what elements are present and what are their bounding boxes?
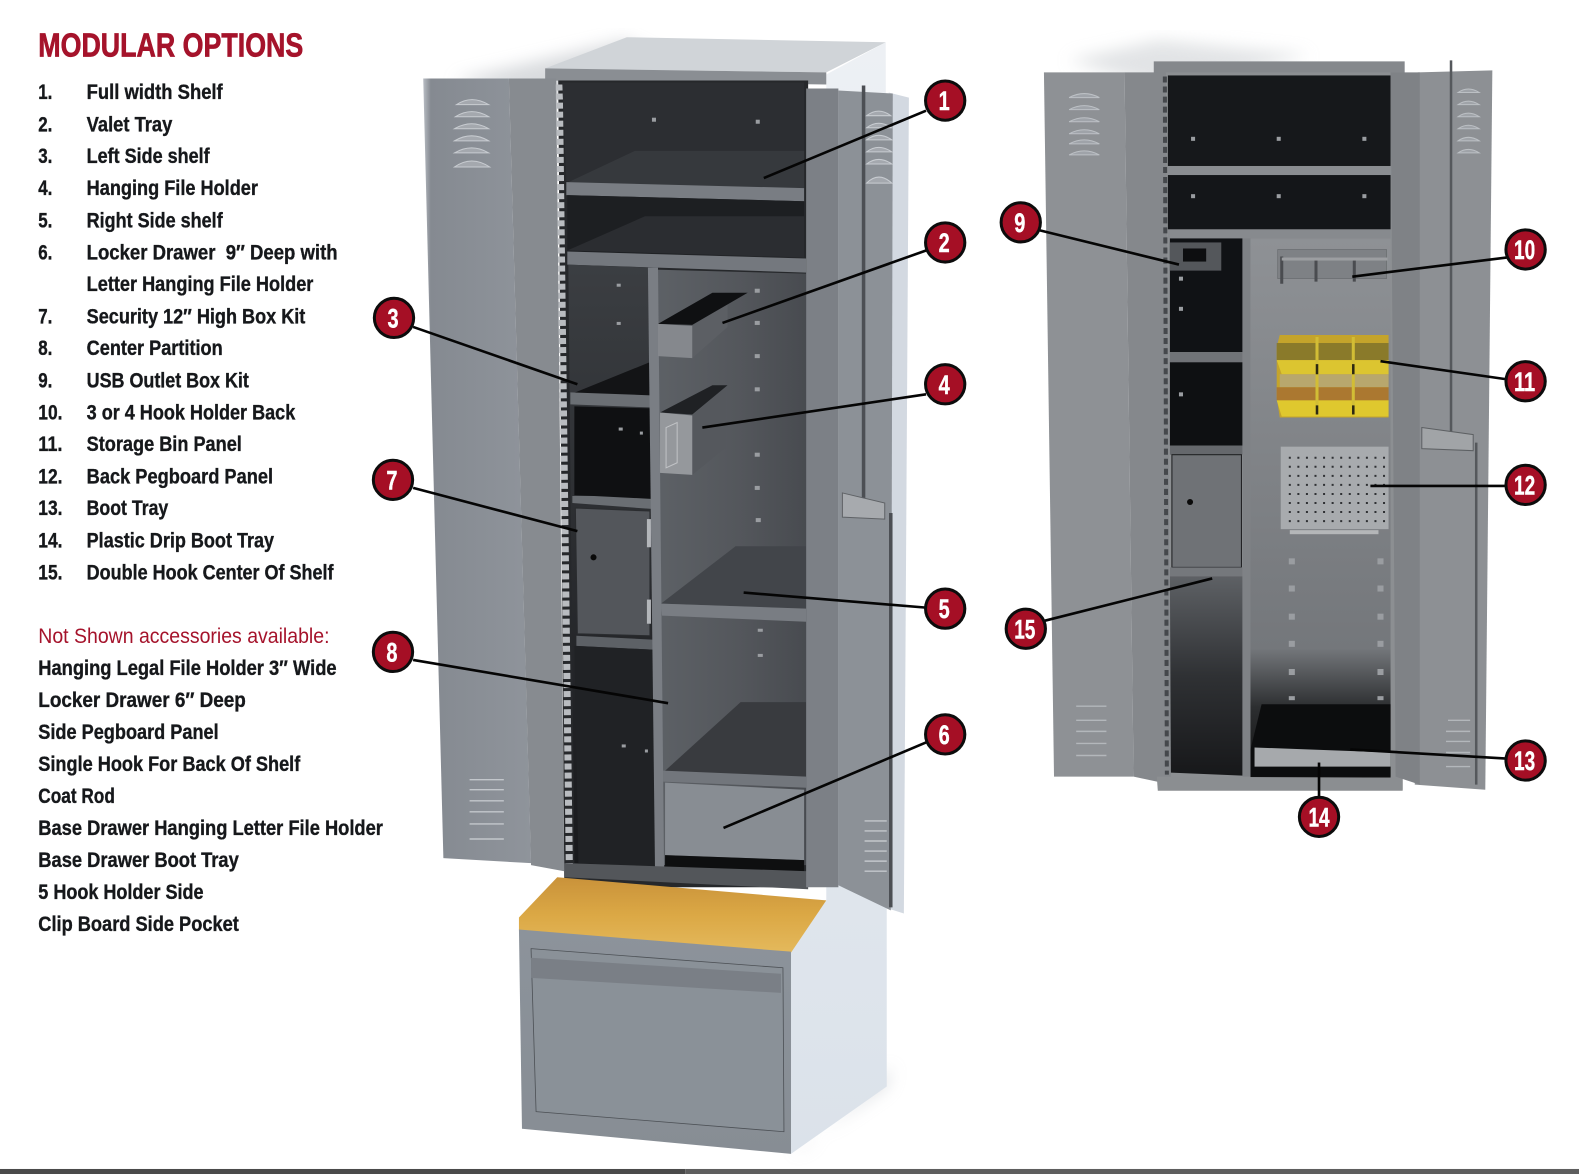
accessory items: Base Drawer Boot Tray [38, 849, 239, 872]
pegboard [1281, 447, 1389, 534]
callout 6 [723, 715, 965, 828]
option 12: 12. [38, 465, 62, 488]
callout 10 [1352, 230, 1545, 277]
rack strip [1165, 76, 1167, 775]
soft shadow [453, 40, 705, 101]
interior base [1159, 72, 1403, 790]
option 2: Valet Tray [87, 113, 173, 136]
left locker illustration [423, 37, 909, 1154]
option 3 [38, 145, 210, 168]
option 6: 6. [38, 242, 52, 265]
callout 8 [373, 632, 668, 703]
callout 14 [1299, 763, 1339, 836]
hook holder [1278, 249, 1388, 284]
soft shadow [1068, 40, 1310, 91]
option 5: 5. [38, 209, 52, 232]
interior back [558, 80, 808, 887]
option 11: 11. [38, 433, 62, 456]
left side shelf [1170, 352, 1242, 362]
callout 7: 7 [386, 464, 398, 495]
option 4 [38, 177, 258, 200]
option 10: 10. [38, 402, 62, 424]
center partition [648, 268, 664, 867]
bench seat [519, 877, 826, 953]
left column [568, 265, 657, 867]
option 1 [38, 81, 224, 104]
callout 2: 2 [939, 227, 950, 258]
callout 15: 15 [1014, 613, 1035, 644]
option 13: Boot Tray [87, 497, 168, 520]
door latch rod [864, 86, 891, 907]
right door [1391, 60, 1492, 790]
double hook shelf [1170, 567, 1242, 576]
option 3: 3. [38, 145, 52, 168]
security box [575, 508, 651, 636]
option 1: 1. [38, 81, 52, 104]
boot tray front [1255, 747, 1391, 767]
upper compartment [562, 82, 804, 189]
option 8 [38, 337, 223, 360]
valet tray [658, 293, 748, 358]
full width shelf [566, 182, 804, 201]
locker drawer [665, 783, 804, 871]
top band [1154, 61, 1405, 74]
option 10: 3 or 4 Hook Holder Back [87, 402, 295, 424]
callout 1: 1 [939, 85, 950, 116]
callout 9 [1001, 203, 1179, 265]
shelf above box [1170, 446, 1242, 455]
accessory items: Hanging Legal File Holder 3″ Wide [38, 657, 337, 680]
bottom bar [0, 1169, 1579, 1174]
option 6 [38, 242, 338, 296]
option 2 [38, 113, 173, 136]
boot tray well [1251, 704, 1391, 777]
base drawer [531, 949, 784, 1132]
callout 6: 6 [939, 719, 950, 750]
USB outlet box [1170, 242, 1221, 271]
option 9: USB Outlet Box Kit [87, 369, 249, 392]
left column [1170, 238, 1242, 446]
right column back [1251, 239, 1391, 778]
rack strip [559, 85, 569, 867]
callout 12: 12 [1514, 469, 1535, 500]
bottom band [1157, 777, 1403, 791]
accessory items: Coat Rod [38, 785, 115, 808]
option 13 [38, 497, 168, 520]
option 9: 9. [38, 369, 52, 392]
callout 5: 5 [939, 593, 950, 624]
option 4: 4. [38, 177, 52, 200]
callout 10: 10 [1514, 234, 1535, 265]
right locker illustration [1044, 40, 1492, 791]
option 14: 14. [38, 529, 62, 552]
callout 13: 13 [1514, 745, 1535, 776]
left door [1044, 72, 1171, 785]
accessory items: 5 Hook Holder Side [38, 881, 204, 904]
right door [806, 86, 909, 913]
accessories heading: Not Shown accessories available: [38, 625, 330, 648]
storage bins [1277, 335, 1389, 417]
option 4: Hanging File Holder [87, 177, 258, 200]
callouts [373, 81, 1545, 836]
callout 1 [764, 81, 965, 178]
option 8: Center Partition [87, 337, 223, 360]
callout 15 [1006, 578, 1212, 648]
base cabinet [519, 930, 791, 1154]
accessory items: Side Pegboard Panel [38, 721, 219, 744]
callout 2 [722, 223, 965, 323]
option 3: Left Side shelf [87, 145, 210, 168]
left door [423, 78, 564, 871]
base drawer handle [531, 958, 781, 993]
option 15: 15. [38, 561, 62, 584]
option 7: 7. [38, 305, 52, 328]
option 5 [38, 209, 224, 232]
cabinet top [545, 37, 886, 72]
hanging file holder [660, 385, 728, 475]
title: MODULAR OPTIONS [38, 27, 303, 64]
option 14: Plastic Drip Boot Tray [87, 529, 274, 552]
top compartment [1168, 75, 1391, 166]
right side shelf [661, 604, 806, 622]
option 11: Storage Bin Panel [87, 433, 242, 456]
option 5: Right Side shelf [87, 209, 224, 232]
lower shelf [567, 251, 806, 273]
option 12: Back Pegboard Panel [87, 465, 273, 488]
shelf one [1168, 166, 1391, 175]
not shown accessories list [38, 625, 383, 936]
accessory items: Base Drawer Hanging Letter File Holder [38, 817, 383, 840]
callout 9: 9 [1014, 207, 1025, 238]
option 6: Letter Hanging File Holder [87, 273, 313, 296]
option 14 [38, 529, 274, 552]
option 7: Security 12″ High Box Kit [87, 305, 305, 328]
numbered options list [38, 81, 338, 584]
door latch rod [1451, 60, 1476, 785]
option 9 [38, 369, 249, 392]
option 2: 2. [38, 113, 52, 136]
callout 8: 8 [386, 636, 398, 667]
callout 11 [1380, 361, 1545, 401]
security box [1172, 455, 1241, 567]
cabinet side panel [791, 42, 887, 1154]
option 11 [38, 433, 242, 456]
second compartment [567, 195, 804, 258]
callout 7 [373, 460, 577, 531]
option 13: 13. [38, 497, 62, 520]
option 6: Locker Drawer 9″ Deep with [87, 242, 338, 265]
callout 11: 11 [1514, 366, 1535, 397]
option 15: Double Hook Center Of Shelf [87, 561, 334, 584]
top front band [545, 68, 826, 85]
callout 4 [702, 365, 965, 428]
left lower compartment [1170, 576, 1242, 776]
door latch [1422, 428, 1473, 451]
accessory items: Locker Drawer 6″ Deep [38, 689, 246, 712]
option 1: Full width Shelf [87, 81, 224, 104]
option 8: 8. [38, 337, 52, 360]
bottom frame [564, 863, 808, 889]
callout 3: 3 [387, 302, 399, 333]
callout 5 [744, 589, 965, 628]
left side shelf [570, 392, 651, 407]
locker drawer shelf [663, 771, 806, 788]
right column [655, 270, 806, 865]
callout 3 [374, 298, 577, 384]
callout 14: 14 [1308, 801, 1330, 832]
center partition [1242, 238, 1251, 777]
callout 13 [1350, 741, 1545, 780]
accessory items [38, 657, 383, 936]
callout 4: 4 [939, 369, 950, 400]
door latch [842, 493, 885, 519]
back wall fasteners [1289, 558, 1384, 700]
accessory items: Single Hook For Back Of Shelf [38, 753, 301, 776]
accessory items: Clip Board Side Pocket [38, 913, 239, 936]
callout 12 [1370, 465, 1545, 505]
second compartment [1168, 175, 1391, 229]
shelf two [1168, 229, 1391, 238]
floor shadow [791, 1066, 892, 1154]
